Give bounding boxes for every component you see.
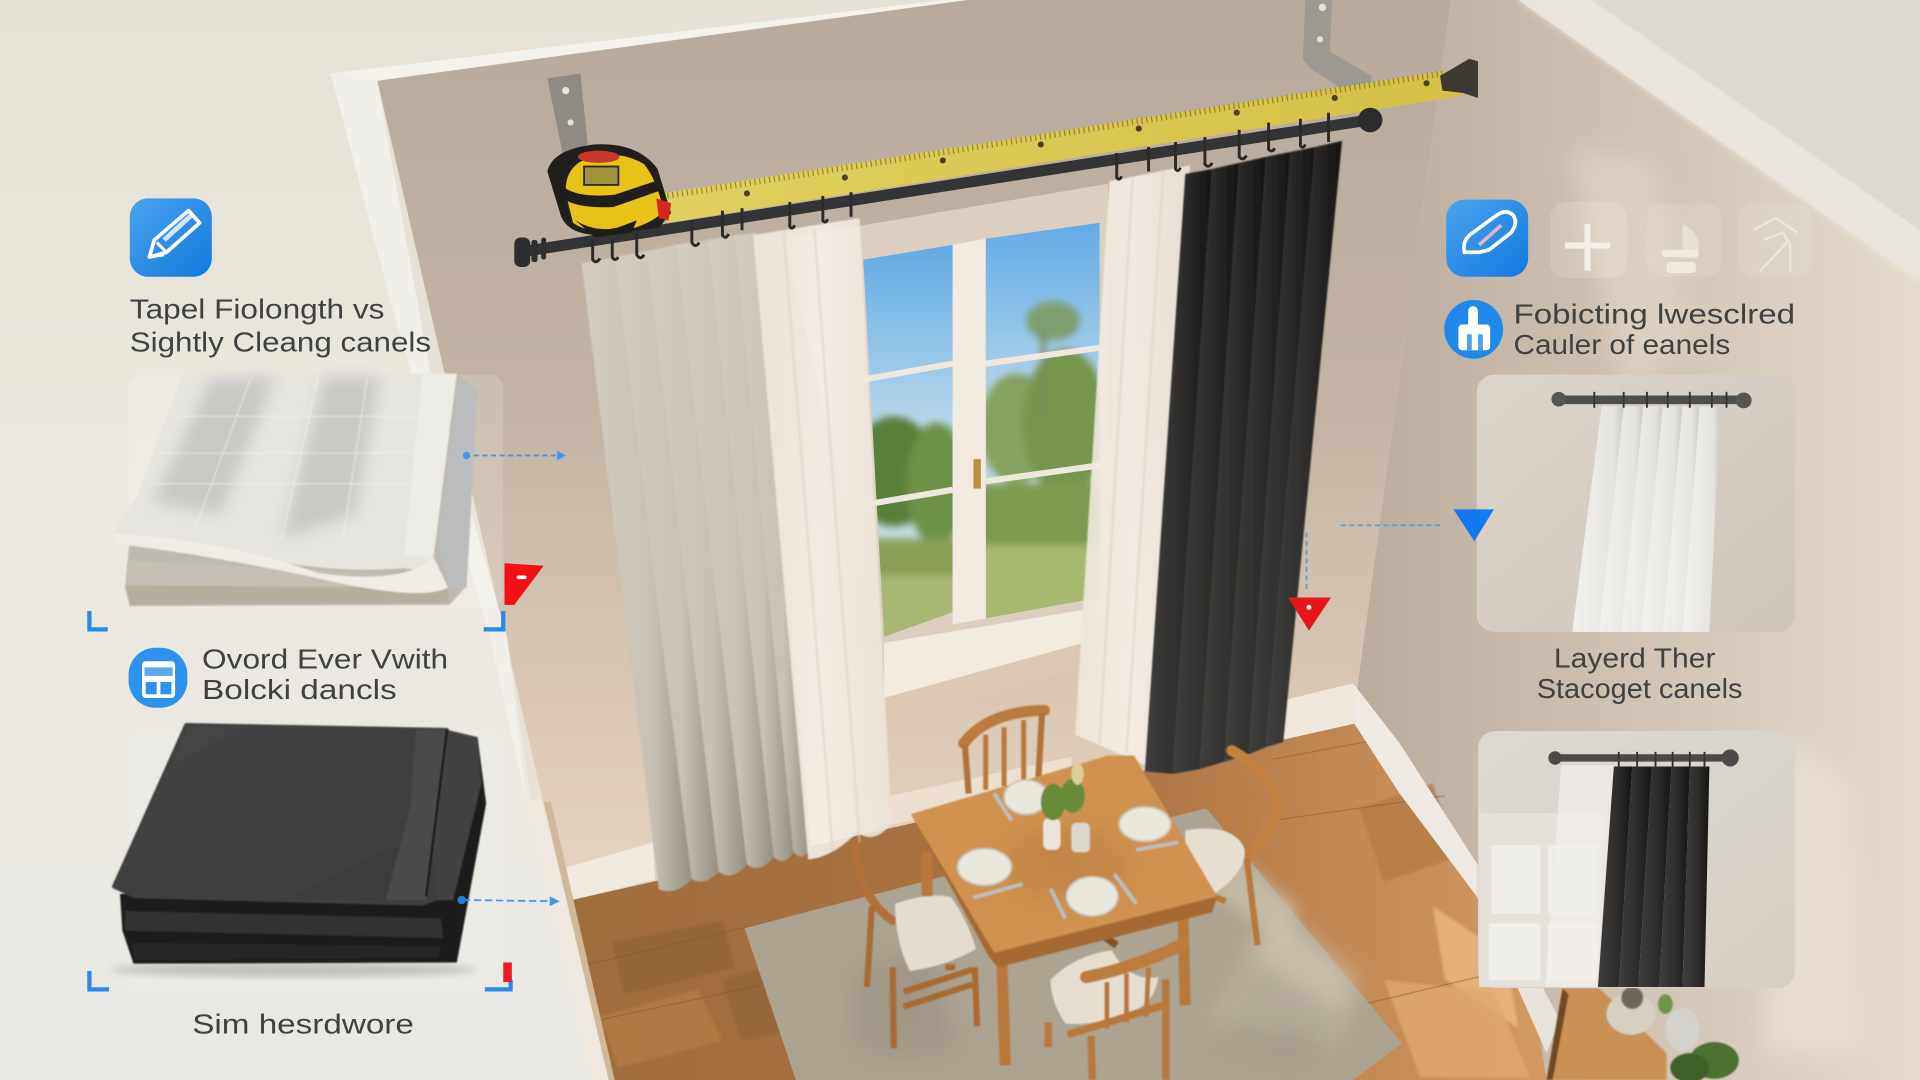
panel: sheer curtain fabric swatch bbox=[114, 373, 503, 607]
cutlery bbox=[973, 793, 1178, 918]
right heading: fabric: Cauler of eanels bbox=[1513, 329, 1730, 360]
caption: layered: Stacoget canels bbox=[1537, 673, 1742, 704]
icon: window panel bbox=[129, 648, 187, 708]
icon: pencil bbox=[130, 198, 212, 277]
mini rod bbox=[1551, 392, 1752, 408]
left wall bracket bbox=[547, 73, 588, 157]
right wall bracket bbox=[1303, 0, 1371, 100]
sheer layer bbox=[1545, 765, 1614, 987]
folded sheer fabric bbox=[114, 373, 478, 606]
window bbox=[784, 184, 1108, 722]
dining set bbox=[856, 710, 1277, 1080]
table legs bbox=[927, 852, 1185, 1065]
icon: ghost hanger bbox=[1739, 203, 1812, 277]
plates bbox=[958, 780, 1171, 916]
yellow tape measure ribbon bbox=[661, 59, 1478, 223]
dimension arrow: dark swatch bbox=[457, 896, 560, 906]
panel: layered curtain example bbox=[1478, 731, 1795, 988]
left chair bbox=[856, 847, 977, 1048]
left heading: blackout panels bbox=[129, 644, 448, 708]
blue marker triangle bbox=[1453, 509, 1494, 541]
tape measure body bbox=[547, 144, 671, 238]
dresser with ornaments bbox=[1547, 987, 1739, 1080]
mini rod bbox=[1548, 749, 1739, 768]
right heading: fabric bbox=[1444, 298, 1795, 360]
caption: slim hardware: Sim hesrdwore bbox=[192, 1008, 414, 1039]
door rail bbox=[527, 798, 610, 1080]
white curtain bbox=[1572, 407, 1720, 632]
left heading: blackout panels: Bolcki dancls bbox=[202, 674, 397, 705]
icon: ghost plus bbox=[1550, 202, 1627, 278]
table top bbox=[911, 756, 1217, 967]
left sheer curtain bbox=[753, 218, 891, 860]
icon: ghost leaf bbox=[1647, 203, 1722, 277]
red marker: left triangle bbox=[504, 563, 544, 605]
baseboards bbox=[560, 842, 655, 900]
black curtain bbox=[1145, 141, 1342, 774]
folded dark fabric bbox=[114, 725, 486, 964]
right heading: fabric: Fobicting lwesclred bbox=[1513, 298, 1795, 329]
left heading: sheer panels: Sightly Cleang canels bbox=[130, 326, 431, 357]
top chair bbox=[964, 710, 1044, 793]
right sheer curtain bbox=[1075, 165, 1190, 765]
rug bbox=[744, 808, 1402, 1080]
caption: layered: Layerd Ther bbox=[1554, 642, 1716, 673]
corner brackets left panels bbox=[89, 611, 511, 989]
trees beyond glass bbox=[872, 410, 952, 637]
curtain rod with tape and brackets bbox=[547, 0, 1478, 223]
right wall bbox=[1357, 0, 1920, 1080]
ghost window bbox=[1479, 813, 1602, 987]
vases and plant bbox=[1041, 763, 1090, 852]
right chair bbox=[1185, 751, 1277, 945]
icon: bracket badge bbox=[1444, 300, 1503, 359]
floor bbox=[572, 724, 1547, 1080]
right icon row bbox=[1446, 200, 1812, 278]
red marker on lower bracket bbox=[503, 962, 512, 982]
caption: layered bbox=[1537, 642, 1742, 704]
grey linen curtain bbox=[582, 233, 811, 891]
dimension arrow: sheer swatch bbox=[463, 451, 566, 460]
left white wall bbox=[0, 0, 943, 1080]
panel: blackout curtain fabric swatch bbox=[110, 725, 503, 991]
left heading: sheer panels: Tapel Fiolongth vs bbox=[130, 293, 384, 324]
dark layer bbox=[1598, 767, 1709, 987]
rod and hooks bbox=[514, 108, 1382, 267]
panel: sheer curtain example bbox=[1477, 375, 1795, 632]
left heading: blackout panels: Ovord Ever Vwith bbox=[202, 644, 448, 675]
icon: tape pencil bbox=[1446, 200, 1528, 277]
back wall bbox=[377, 0, 1451, 906]
dimension line: right of curtain bbox=[1307, 525, 1440, 593]
red marker: curtain hem bbox=[1288, 598, 1331, 631]
left heading: sheer panels bbox=[130, 198, 431, 357]
bottom chair bbox=[1048, 944, 1183, 1080]
